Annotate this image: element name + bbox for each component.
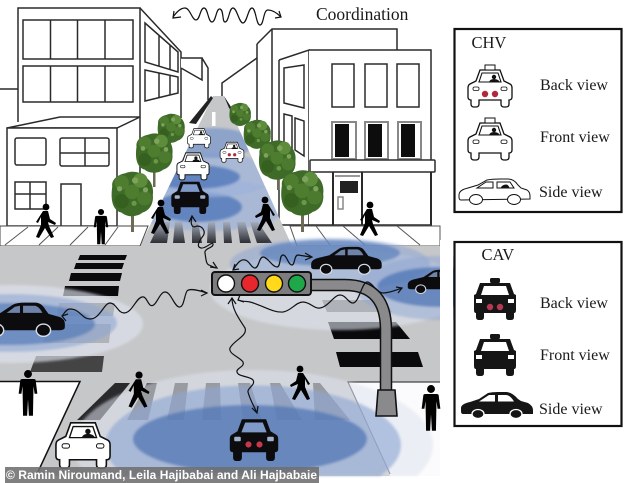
scene background: street illustration <box>0 0 440 476</box>
right buildings <box>222 29 435 226</box>
CHV title: CHV <box>472 33 506 52</box>
vehicle: left black side view <box>0 303 65 336</box>
label: back view: Back view <box>540 77 608 94</box>
main intersection road <box>0 246 440 476</box>
panel: CAV legend <box>454 242 622 426</box>
icon: CAV side view car <box>461 392 533 418</box>
icon: CHV back view car <box>468 65 512 107</box>
CAV title: CAV <box>482 245 514 264</box>
trees: right side <box>229 103 323 232</box>
crosswalk: upper street <box>150 222 272 243</box>
road to horizon <box>140 96 292 246</box>
traffic light pole <box>310 285 397 416</box>
panel: CHV legend <box>454 29 622 212</box>
icon: CAV front view car <box>474 334 516 376</box>
communication zone: upper street <box>151 126 280 232</box>
top sidewalks <box>0 226 440 246</box>
left buildings <box>0 8 208 226</box>
crosswalk: bottom <box>77 383 350 420</box>
vehicle: bottom black back view <box>230 419 278 461</box>
photo credit bar: © Ramin Niroumand, Leila Hajibabai and Ali Hajbabaie <box>6 468 317 482</box>
crosswalk: left <box>30 255 127 372</box>
label: front view: Front view <box>540 347 610 364</box>
heading: Coordination: Coordination <box>316 4 409 24</box>
wave arrows: communication links <box>62 8 402 413</box>
lower left sidewalk <box>0 382 80 476</box>
trees: left side <box>112 114 185 232</box>
vehicles on upper street <box>171 129 244 214</box>
communication zone: bottom vehicle <box>73 370 433 476</box>
communication zone: left vehicle <box>0 285 143 363</box>
label: side view: Side view <box>539 184 603 201</box>
vehicle: bottom left white back view <box>56 423 110 468</box>
label: back view: Back view <box>540 295 608 312</box>
label: side view: Side view <box>539 401 603 418</box>
icon: CHV side view car <box>459 179 530 204</box>
icon: CHV front view car <box>468 118 512 160</box>
communication zone: right vehicles <box>210 238 524 330</box>
label: front view: Front view <box>540 129 610 146</box>
vehicle: right black side view, cut off by frame <box>408 270 440 294</box>
icon: CAV back view car <box>474 278 516 320</box>
vehicle: upper right black side view <box>311 247 382 274</box>
pedestrians <box>19 197 440 431</box>
lower right sidewalk <box>348 382 440 476</box>
crosswalk: right <box>322 300 423 367</box>
traffic light <box>212 272 311 295</box>
